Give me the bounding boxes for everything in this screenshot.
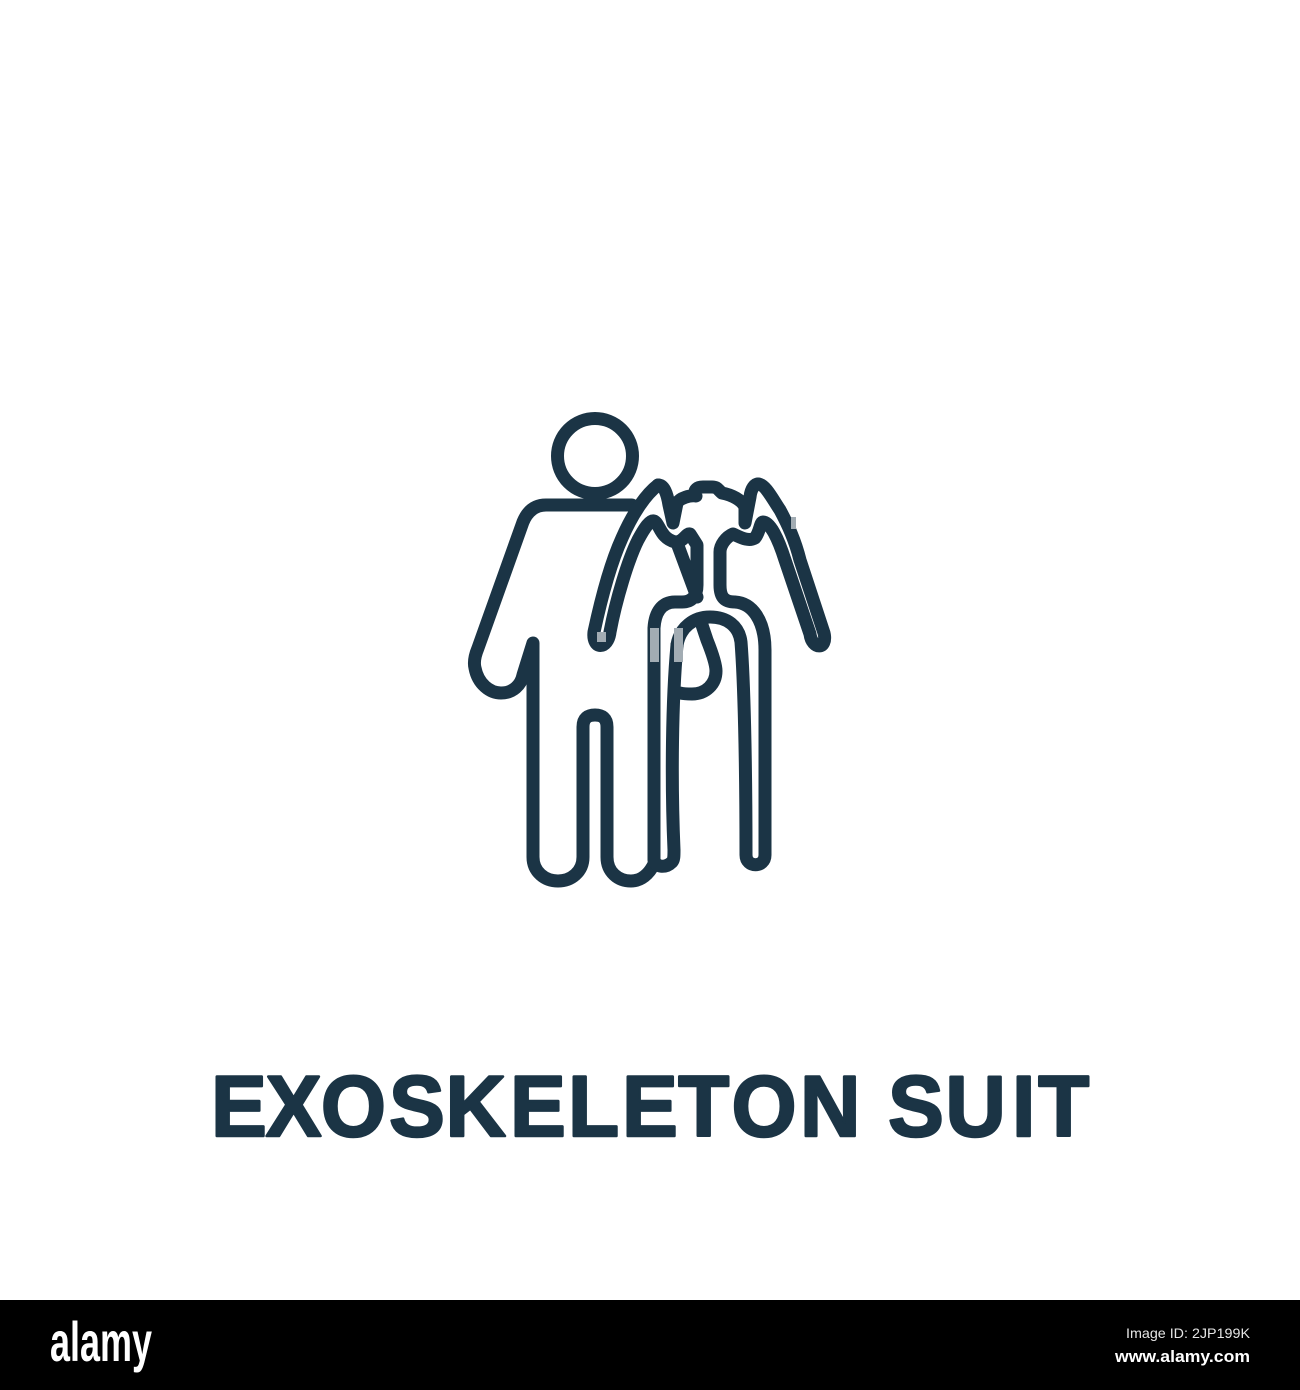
title: EXOSKELETON SUIT — [211, 1058, 1089, 1154]
icon: person far hand — [680, 625, 716, 694]
icon: watermark fragments — [597, 517, 796, 662]
icon: exoskeleton suit with person — [474, 418, 825, 881]
website: www.alamy.com — [1114, 1347, 1250, 1366]
footer band — [0, 1300, 1300, 1390]
icon: person body outline — [474, 505, 654, 881]
image id: Image ID: 2JP199K — [1126, 1325, 1251, 1341]
icon: person head — [558, 418, 632, 494]
icon: exoskeleton right leg and arm — [677, 484, 825, 865]
icon: exoskeleton left arm and leg — [594, 485, 697, 866]
icon: exoskeleton frame — [594, 484, 825, 866]
logo: alamy: alamy — [50, 1310, 152, 1373]
icon: exoskeleton shoulders — [658, 484, 758, 523]
icon: exoskeleton chest strut — [677, 543, 697, 597]
